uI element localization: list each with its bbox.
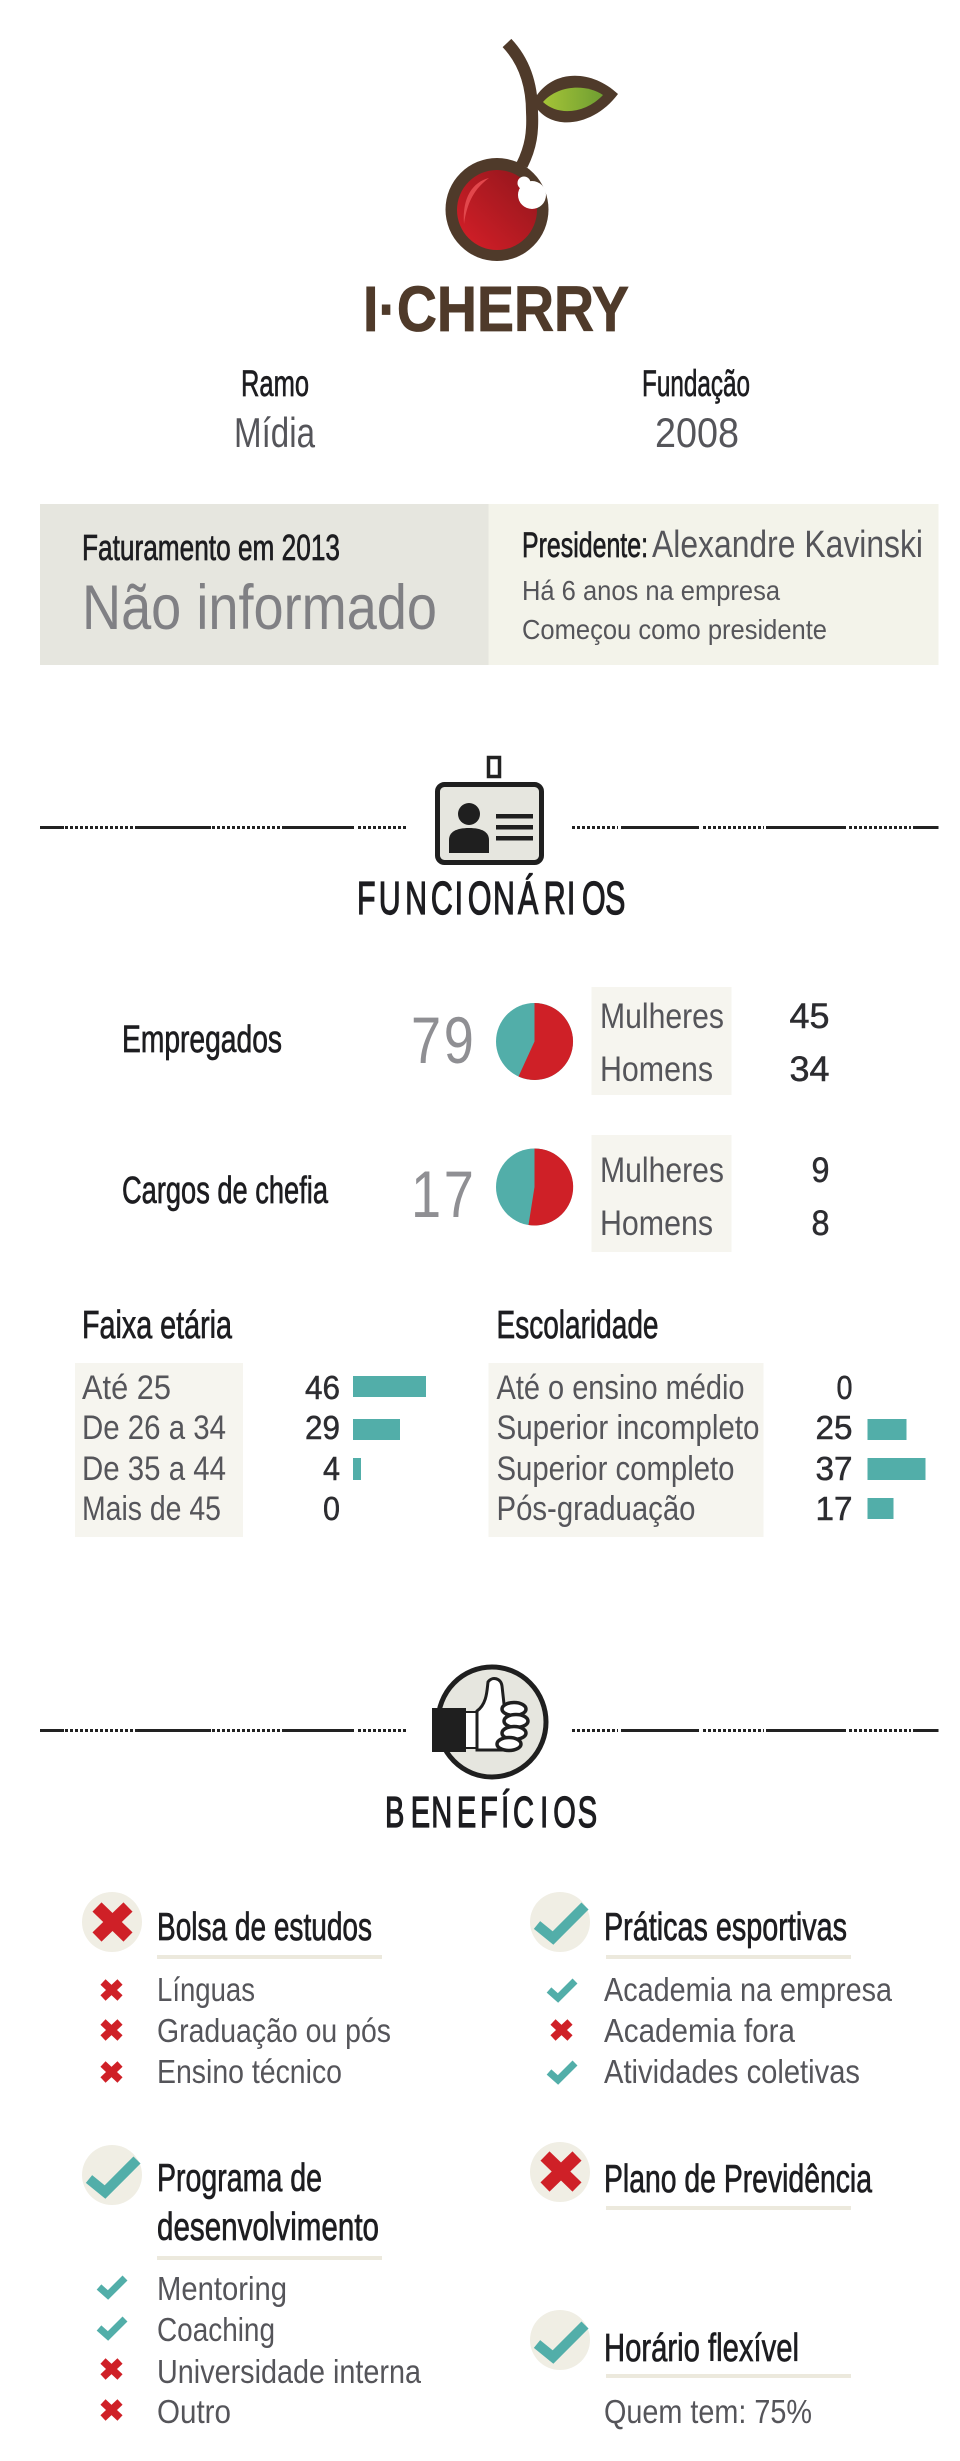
sector: Ramo bbox=[241, 363, 309, 404]
icon: cross bbox=[530, 2142, 590, 2202]
bar chart: escolaridade: 17 bbox=[816, 1490, 852, 1527]
sector bbox=[234, 363, 316, 456]
item list: Mentoring bbox=[157, 2270, 287, 2307]
bar chart: escolaridade: Até o ensino médio bbox=[496, 1369, 744, 1407]
legend: Mulheres bbox=[600, 1151, 724, 1190]
section divider: funcionários bbox=[40, 826, 938, 829]
item list: Universidade interna bbox=[157, 2353, 422, 2390]
title: Horário flexível bbox=[604, 2327, 799, 2370]
item list: Ensino técnico bbox=[157, 2053, 342, 2090]
item list: Línguas bbox=[157, 1971, 255, 2008]
bar chart: escolaridade bbox=[488, 1304, 926, 1537]
label: Cargos de chefia bbox=[122, 1170, 329, 1212]
bar chart: faixa etária: De 26 a 34 bbox=[82, 1409, 226, 1447]
legend bbox=[592, 1135, 830, 1252]
title: Práticas esportivas bbox=[604, 1906, 847, 1949]
title: Bolsa de estudos bbox=[157, 1906, 372, 1949]
item list: Academia fora bbox=[604, 2012, 796, 2049]
logo: I-Cherry bbox=[363, 43, 629, 345]
item list: Coaching bbox=[157, 2311, 275, 2348]
bar chart: escolaridade: 0 bbox=[836, 1369, 852, 1406]
item list: Graduação ou pós bbox=[157, 2012, 391, 2049]
title: desenvolvimento bbox=[157, 2206, 379, 2249]
heading: Escolaridade bbox=[496, 1304, 658, 1347]
bar chart: faixa etária: 4 bbox=[323, 1450, 340, 1487]
item list: Academia na empresa bbox=[604, 1971, 893, 2008]
bar chart: escolaridade: Superior completo bbox=[496, 1450, 734, 1488]
benefit: plano de previdência bbox=[530, 2142, 872, 2210]
bar chart: faixa etária bbox=[75, 1304, 426, 1537]
bar chart: faixa etária: Mais de 45 bbox=[82, 1490, 221, 1528]
panel: revenue bbox=[40, 504, 488, 665]
icon: cross bbox=[82, 1892, 142, 1952]
label box bbox=[488, 1363, 764, 1537]
heading: benefícios: BENEFÍCIOS bbox=[385, 1787, 597, 1836]
benefit: programa de desenvolvimento bbox=[82, 2145, 422, 2430]
item list bbox=[549, 1971, 893, 2090]
icon: check bbox=[82, 2145, 142, 2205]
legend bbox=[592, 987, 830, 1095]
row: cargos de chefia bbox=[122, 1135, 830, 1252]
benefit: práticas esportivas bbox=[530, 1892, 893, 2090]
bar chart: faixa etária: 0 bbox=[323, 1490, 340, 1527]
title bbox=[157, 2157, 379, 2249]
section divider: benefícios bbox=[40, 1729, 938, 1732]
legend: Homens bbox=[600, 1050, 713, 1089]
benefit: horário flexível bbox=[530, 2310, 851, 2430]
panel: president: Há 6 anos na empresa bbox=[522, 575, 780, 606]
bar chart: escolaridade: Pós-graduação bbox=[496, 1490, 696, 1528]
label: Empregados bbox=[122, 1019, 282, 1061]
icon: thumbs up bbox=[432, 1667, 546, 1777]
panel: president: Começou como presidente bbox=[522, 614, 827, 645]
pie chart: gender bbox=[496, 1003, 573, 1080]
panel: revenue: Faturamento em 2013 bbox=[82, 527, 340, 568]
total: 79 bbox=[411, 1003, 474, 1077]
bar chart: escolaridade: 37 bbox=[816, 1450, 852, 1487]
sector: Mídia bbox=[234, 409, 316, 456]
bar chart: escolaridade: Superior incompleto bbox=[496, 1409, 760, 1447]
item list: Atividades coletivas bbox=[604, 2053, 860, 2090]
legend: Homens bbox=[600, 1204, 713, 1243]
legend: 45 bbox=[790, 997, 830, 1036]
legend: Mulheres bbox=[600, 997, 724, 1036]
item list: Outro bbox=[157, 2393, 231, 2430]
panel: revenue: Não informado bbox=[82, 573, 437, 643]
bar chart: faixa etária: 29 bbox=[305, 1409, 340, 1446]
legend: 9 bbox=[812, 1151, 830, 1190]
founding year: 2008 bbox=[655, 409, 739, 456]
bar chart: faixa etária: Até 25 bbox=[82, 1369, 171, 1407]
heading: funcionários: FUNCIONÁRIOS bbox=[357, 874, 625, 925]
benefit: bolsa de estudos bbox=[82, 1892, 391, 2090]
title: Programa de bbox=[157, 2157, 322, 2200]
bar chart: escolaridade: 25 bbox=[816, 1409, 852, 1446]
icon: check bbox=[530, 2310, 590, 2370]
bar chart: faixa etária: 46 bbox=[305, 1369, 340, 1406]
item list bbox=[99, 2270, 422, 2430]
heading: Faixa etária bbox=[82, 1304, 232, 1347]
icon: id badge bbox=[438, 758, 542, 862]
panel: president bbox=[488, 504, 938, 665]
founding year: Fundação bbox=[642, 363, 750, 404]
total: 17 bbox=[411, 1157, 474, 1231]
icon: cherry bbox=[446, 43, 618, 261]
bar chart: faixa etária: De 35 a 44 bbox=[82, 1450, 226, 1488]
icon: check bbox=[530, 1892, 590, 1952]
logo wordmark: I·CHERRY bbox=[363, 273, 629, 345]
founding year bbox=[642, 363, 750, 456]
panel: president: Presidente: bbox=[522, 526, 648, 565]
detail: Quem tem: 75% bbox=[604, 2393, 812, 2430]
legend: 34 bbox=[790, 1050, 830, 1089]
row: empregados bbox=[122, 987, 830, 1095]
label box bbox=[75, 1363, 243, 1537]
item list bbox=[103, 1971, 391, 2090]
pie chart: gender bbox=[496, 1148, 573, 1226]
legend: 8 bbox=[812, 1204, 830, 1243]
